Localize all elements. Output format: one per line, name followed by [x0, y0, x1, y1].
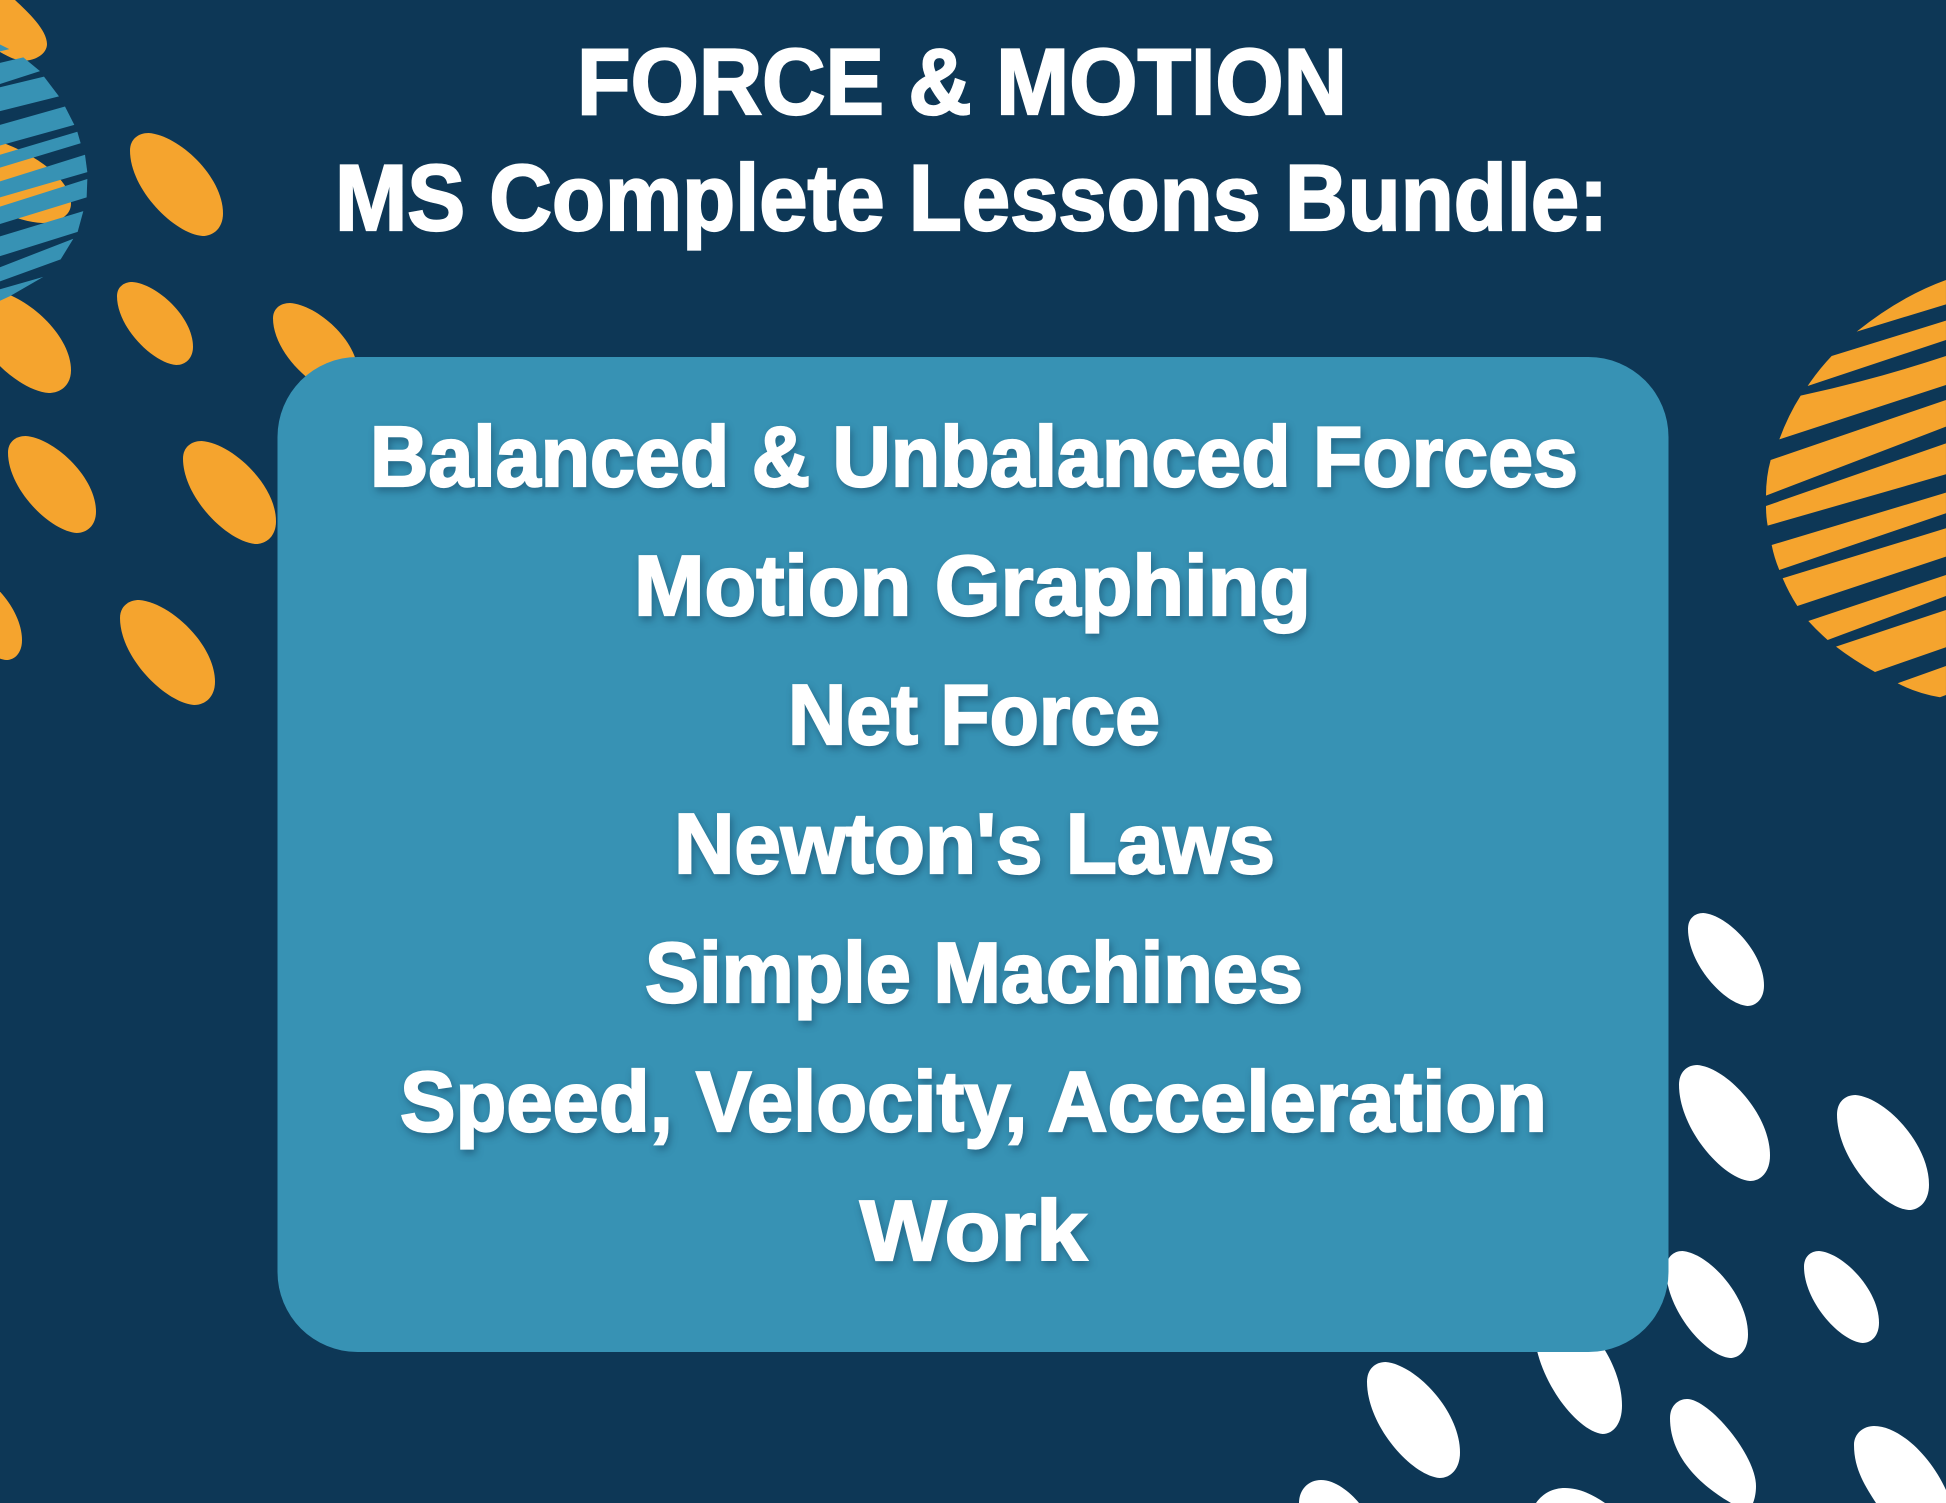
- white oval 2: [1679, 1065, 1770, 1181]
- oval 5: [8, 436, 96, 533]
- lesson: motion graphing: Motion Graphing: [634, 539, 1311, 634]
- lesson: balanced and unbalanced forces: Balanced & Unbalanced Forces: [370, 410, 1578, 505]
- orange ovals, left: [0, 0, 358, 705]
- white oval 9, cropped at right and bottom: [1854, 1426, 1946, 1503]
- striped circle, right: [1766, 280, 1946, 697]
- lesson: net force: Net Force: [788, 668, 1160, 763]
- white oval 11, cropped at bottom: [1536, 1488, 1605, 1503]
- title: [335, 29, 1608, 250]
- white oval 4, behind panel: [1666, 1251, 1748, 1358]
- oval: top-left, cropped: [0, 0, 47, 61]
- oval behind left stripes: [0, 144, 71, 223]
- white oval 7: [1367, 1362, 1460, 1478]
- oval 2: [117, 282, 193, 365]
- title line 2: MS Complete Lessons Bundle:: [335, 145, 1608, 250]
- oval 7, cropped at left: [0, 592, 22, 660]
- white ovals, bottom right: [1299, 913, 1946, 1503]
- panel: lesson list background: [278, 357, 1668, 1352]
- white oval 3: [1837, 1095, 1929, 1210]
- lesson list: [370, 410, 1578, 1279]
- white oval 10, cropped at bottom: [1299, 1480, 1359, 1503]
- lesson: work: Work: [860, 1184, 1088, 1279]
- white oval 5: [1804, 1251, 1879, 1343]
- white oval 8, cropped at bottom: [1670, 1399, 1756, 1503]
- oval 1: [130, 133, 223, 236]
- striped circle, top left: [0, 45, 87, 301]
- lesson: simple machines: Simple Machines: [645, 926, 1303, 1021]
- oval 3, behind panel: [273, 303, 355, 376]
- lesson: speed, velocity, acceleration: Speed, Velocity, Acceleration: [400, 1055, 1547, 1150]
- oval 8: [120, 600, 215, 705]
- lesson: newton's laws: Newton's Laws: [674, 797, 1275, 892]
- oval 4, cropped at left: [0, 290, 71, 393]
- oval 6: [183, 441, 276, 544]
- white oval 6, behind panel: [1534, 1305, 1622, 1434]
- white oval 1: [1688, 913, 1764, 1006]
- title line 1: FORCE & MOTION: [577, 29, 1347, 134]
